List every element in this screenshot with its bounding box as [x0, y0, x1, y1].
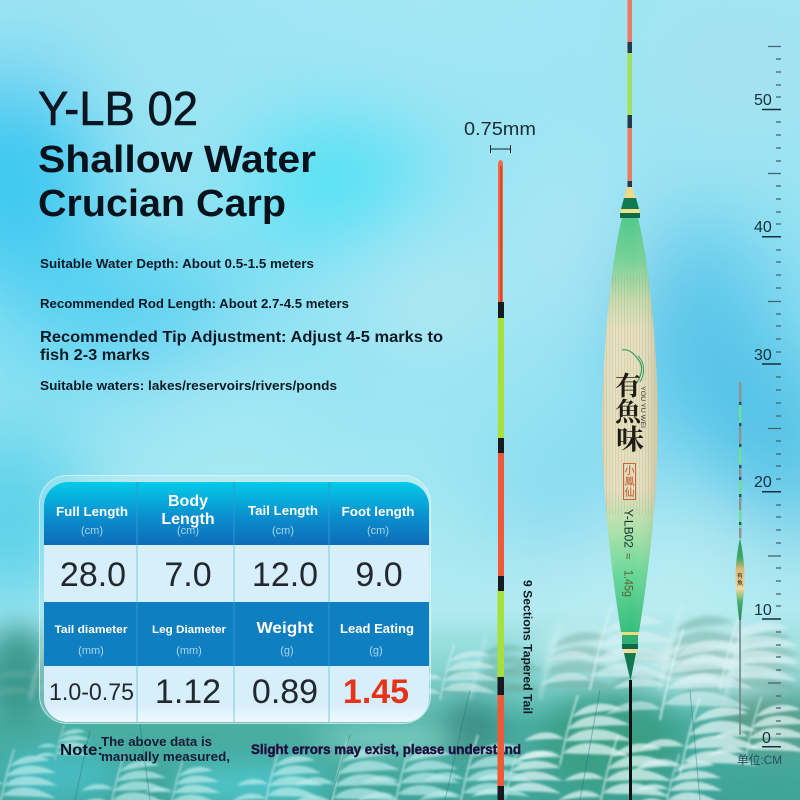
table row 1 headers: (cm): [177, 525, 199, 537]
red seal stamp: 小: [624, 465, 634, 477]
brand calligraphy: 魚: [615, 392, 643, 429]
table row 1 values: 9.0: [355, 556, 403, 594]
table row 1 headers: Body: [168, 493, 208, 510]
model and weight mark: ≈: [622, 553, 634, 559]
table row 1 values: [60, 556, 403, 594]
brand calligraphy: 味: [616, 418, 644, 458]
float body: [600, 218, 660, 632]
float collar: [620, 187, 640, 218]
heading: shallow water crucian carp: Shallow Water: [38, 139, 316, 181]
caption: 9 sections tapered tail: 9 Sections Tapered Tail: [520, 580, 532, 714]
table row 2 headers: [54, 620, 414, 657]
heading: shallow water crucian carp: Crucian Carp: [38, 183, 286, 225]
table row 2 headers: (g): [280, 645, 294, 657]
note: data disclaimer: Note:: [60, 742, 103, 759]
model and weight mark: Y-LB02: [622, 509, 634, 548]
note: data disclaimer: manually measured,: [101, 749, 230, 764]
ruler labels: 10: [754, 602, 772, 619]
table row 1 headers: (cm): [272, 525, 294, 537]
table row 2 headers: (mm): [78, 645, 104, 657]
text block: usage recommendations: Recommended Tip Adjustment: Adjust 4-5 marks to: [40, 329, 443, 346]
note: data disclaimer: The above data is: [101, 734, 212, 749]
scale float miniature: 魚: [737, 579, 743, 587]
panel: specification table: [40, 476, 430, 724]
table row 1 headers: Length: [161, 511, 215, 528]
table row 1 headers: (cm): [81, 525, 103, 537]
float foot: [622, 632, 638, 800]
brand calligraphy: 有: [615, 366, 641, 403]
heading: shallow water crucian carp: [38, 139, 316, 225]
float antenna: [628, 0, 632, 187]
red seal stamp: 鳳: [624, 476, 634, 488]
note: data disclaimer: [60, 734, 521, 764]
red seal stamp: [624, 464, 636, 500]
table row 2 headers: Weight: [256, 620, 314, 637]
text block: usage recommendations: Suitable Water Depth: About 0.5-1.5 meters: [40, 256, 314, 271]
table row 1 values: 7.0: [164, 556, 212, 594]
brand calligraphy: YOU YU WEI: [639, 386, 645, 428]
table row 2 values: 0.89: [252, 673, 318, 711]
note: data disclaimer: Slight errors may exist, please understand: [251, 741, 521, 757]
background: reed grass: [0, 606, 800, 800]
table row 2 headers: Tail diameter: [54, 624, 128, 636]
red seal stamp: 仙: [624, 486, 634, 499]
ruler labels: 40: [754, 219, 772, 236]
ruler labels: 30: [754, 347, 772, 364]
ruler labels: 20: [754, 474, 772, 491]
table row 2 values: [49, 673, 409, 711]
table row 2 headers: (mm): [176, 645, 202, 657]
text block: usage recommendations: fish 2-3 marks: [40, 347, 150, 364]
scale float miniature: [736, 382, 744, 735]
tapered tail close-up: [498, 160, 504, 800]
text block: usage recommendations: Recommended Rod Length: About 2.7-4.5 meters: [40, 296, 349, 311]
unit label: 单位:CM: [737, 752, 782, 767]
text block: usage recommendations: [40, 256, 443, 393]
brand calligraphy: [615, 350, 645, 458]
table row 2 values: 1.45: [343, 673, 409, 711]
table row 2 values: 1.0-0.75: [49, 679, 134, 706]
table row 1 headers: Tail Length: [248, 503, 318, 518]
table row 1 values: 12.0: [252, 556, 318, 594]
table row 1 headers: Full Length: [56, 504, 128, 519]
diameter label: 0.75mm: 0.75mm: [464, 119, 536, 139]
table row 1 headers: Foot length: [342, 504, 415, 519]
diameter label: 0.75mm: [464, 119, 536, 153]
table row 1 headers: (cm): [367, 525, 389, 537]
table row 2 headers: (g): [369, 645, 383, 657]
main float: [600, 0, 660, 800]
table row 1 values: 28.0: [60, 556, 126, 594]
scale float miniature: 有: [737, 572, 743, 580]
ruler labels: [754, 92, 772, 747]
model and weight mark: [622, 509, 634, 597]
table row 2 headers: Lead Eating: [340, 621, 414, 636]
table row 1 headers: [56, 493, 415, 537]
text block: usage recommendations: Suitable waters: lakes/reservoirs/rivers/ponds: [40, 378, 337, 393]
table row 2 values: 1.12: [155, 673, 221, 711]
model and weight mark: 1.45g: [622, 570, 634, 597]
table row 2 headers: Leg Diameter: [152, 624, 227, 636]
ruler labels: 50: [754, 92, 772, 109]
ruler labels: 0: [762, 730, 771, 747]
title: model name: Y-LB 02: [38, 83, 198, 136]
ruler: [737, 46, 782, 767]
